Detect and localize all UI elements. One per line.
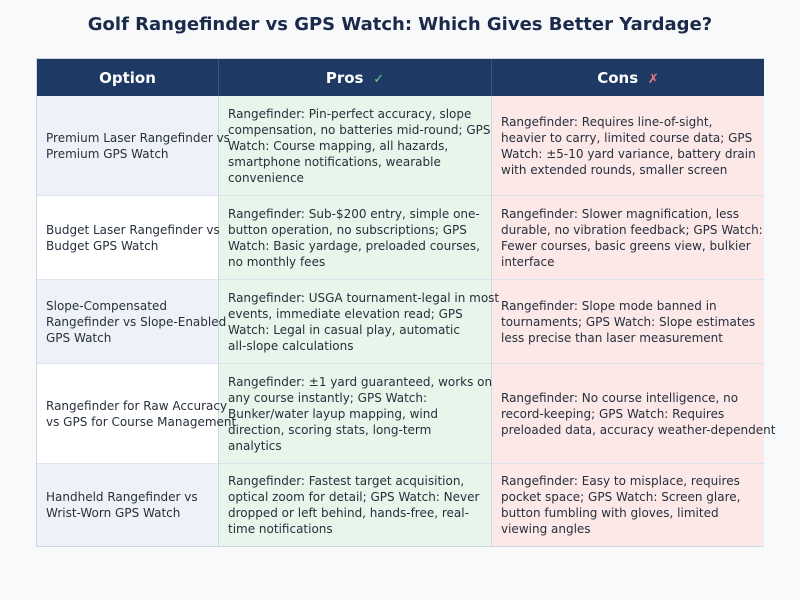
row 4 option: vs GPS for Course Management: [46, 414, 236, 428]
row 3 cons: less precise than laser measurement: [501, 330, 723, 344]
row 4 cons: preloaded data, accuracy weather-dependent: [501, 422, 775, 436]
row 2 option: Budget GPS Watch: [46, 238, 158, 252]
row 2 cons: durable, no vibration feedback; GPS Watch:: [501, 222, 763, 236]
row 1 cons: [492, 96, 764, 196]
row 3 option: [37, 280, 219, 364]
row 1 cons: Watch: ±5-10 yard variance, battery drain: [501, 146, 756, 160]
row 5 pros: optical zoom for detail; GPS Watch: Never: [228, 490, 479, 504]
row 5 pros: time notifications: [228, 522, 333, 536]
row 4 cons: Rangefinder: No course intelligence, no: [501, 390, 738, 404]
row 2 pros: Watch: Basic yardage, preloaded courses,: [228, 238, 480, 252]
row 1 option: [37, 96, 219, 196]
row 3 pros: all-slope calculations: [228, 338, 354, 352]
row 4 pros: analytics: [228, 438, 282, 452]
row 3 pros: [219, 280, 492, 364]
row 4 pros: any course instantly; GPS Watch:: [228, 390, 427, 404]
row 5 option: Handheld Rangefinder vs: [46, 490, 198, 504]
row 1 option: Premium Laser Rangefinder vs: [46, 130, 230, 144]
row 2 pros: button operation, no subscriptions; GPS: [228, 222, 467, 236]
header: cons: [492, 59, 764, 96]
row 5 pros: dropped or left behind, hands-free, real-: [228, 506, 469, 520]
row 1 pros: smartphone notifications, wearable: [228, 154, 441, 168]
row 3 pros: Watch: Legal in casual play, automatic: [228, 322, 460, 336]
row 1 pros: [219, 96, 492, 196]
row 2 pros: Rangefinder: Sub-$200 entry, simple one-: [228, 206, 480, 220]
row 3 option: Slope-Compensated: [46, 298, 167, 312]
row 5 option: Wrist-Worn GPS Watch: [46, 506, 180, 520]
row 1 pros: Rangefinder: Pin-perfect accuracy, slope: [228, 106, 471, 120]
row 2 pros: [219, 196, 492, 280]
header: pros: Pros ✓: [326, 69, 384, 87]
row 3 option: Rangefinder vs Slope-Enabled: [46, 314, 226, 328]
row 5 cons: [492, 464, 764, 546]
row 3 cons: Rangefinder: Slope mode banned in: [501, 298, 717, 312]
row 2 option: [37, 196, 219, 280]
row 5 cons: button fumbling with gloves, limited: [501, 506, 719, 520]
header: option: Option: [99, 69, 156, 87]
title: Golf Rangefinder vs GPS Watch: Which Gives Better Yardage?: [88, 14, 712, 35]
row 3 pros: Rangefinder: USGA tournament-legal in most: [228, 290, 499, 304]
row 1 pros: compensation, no batteries mid-round; GPS: [228, 122, 491, 136]
header: cons: Cons ✗: [597, 69, 659, 87]
row 4 pros: Rangefinder: ±1 yard guaranteed, works on: [228, 374, 492, 388]
row 2 option: Budget Laser Rangefinder vs: [46, 222, 220, 236]
row 5 cons: Rangefinder: Easy to misplace, requires: [501, 474, 740, 488]
row 2 cons: Fewer courses, basic greens view, bulkier: [501, 238, 751, 252]
row 5 cons: pocket space; GPS Watch: Screen glare,: [501, 490, 740, 504]
row 5 pros: [219, 464, 492, 546]
row 3 option: GPS Watch: [46, 330, 111, 344]
row 2 cons: interface: [501, 254, 555, 268]
row 1 cons: with extended rounds, smaller screen: [501, 162, 727, 176]
row 1 pros: Watch: Course mapping, all hazards,: [228, 138, 448, 152]
row 3 cons: tournaments; GPS Watch: Slope estimates: [501, 314, 755, 328]
row 2 cons: Rangefinder: Slower magnification, less: [501, 206, 739, 220]
row 3 pros: events, immediate elevation read; GPS: [228, 306, 463, 320]
row 4 cons: [492, 364, 764, 464]
row 1 option: Premium GPS Watch: [46, 146, 169, 160]
header: pros: [219, 59, 492, 96]
row 4 cons: record-keeping; GPS Watch: Requires: [501, 406, 724, 420]
row 4 pros: Bunker/water layup mapping, wind: [228, 406, 438, 420]
row 5 cons: viewing angles: [501, 522, 591, 536]
row 4 option: Rangefinder for Raw Accuracy: [46, 398, 227, 412]
row 3 cons: [492, 280, 764, 364]
row 2 cons: [492, 196, 764, 280]
row 4 option: [37, 364, 219, 464]
row 5 pros: Rangefinder: Fastest target acquisition,: [228, 474, 464, 488]
row 2 pros: no monthly fees: [228, 254, 325, 268]
row 1 cons: heavier to carry, limited course data; GPS: [501, 130, 752, 144]
table: [36, 58, 764, 547]
header: option: [37, 59, 219, 96]
row 4 pros: [219, 364, 492, 464]
row 5 option: [37, 464, 219, 546]
row 1 pros: convenience: [228, 170, 304, 184]
row 4 pros: direction, scoring stats, long-term: [228, 422, 431, 436]
row 1 cons: Rangefinder: Requires line-of-sight,: [501, 114, 712, 128]
